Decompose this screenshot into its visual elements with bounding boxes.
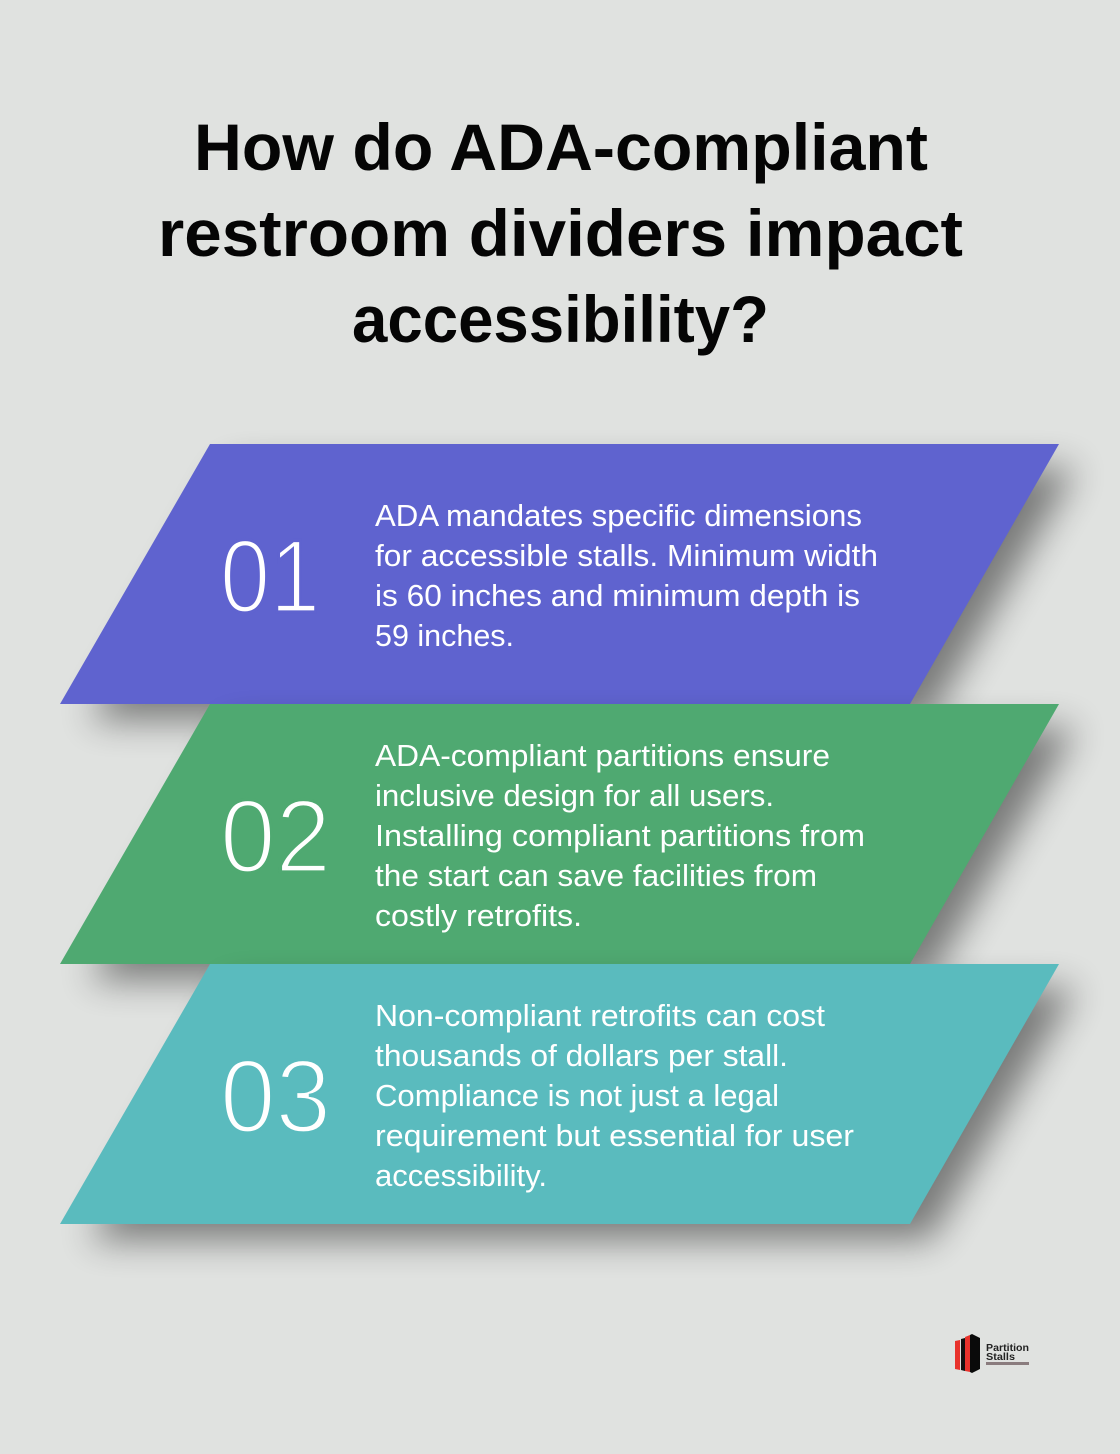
logo: Partition Stalls <box>955 1334 1029 1373</box>
title: How do ADA-compliant <box>194 110 928 184</box>
text: step 01: is 60 inches and minimum depth is <box>375 578 860 613</box>
text: step 02: the start can save facilities from <box>375 858 817 893</box>
number 01: 01 <box>220 519 320 635</box>
number 02: 02 <box>220 779 331 895</box>
text: step 01 <box>375 498 878 653</box>
text: step 03: Non-compliant retrofits can cost <box>375 998 825 1033</box>
title: restroom dividers impact <box>158 196 963 270</box>
text: step 02: inclusive design for all users. <box>375 778 774 813</box>
panel: step 02 <box>60 704 1076 980</box>
logo wordmark: Partition <box>986 1343 1029 1354</box>
text: step 02 <box>375 738 865 933</box>
text: step 03: thousands of dollars per stall. <box>375 1038 788 1073</box>
text: step 01: for accessible stalls. Minimum width <box>375 538 878 573</box>
logo wordmark <box>986 1343 1029 1365</box>
text: step 03: Compliance is not just a legal <box>375 1078 779 1113</box>
panel: step 01 <box>60 444 1076 720</box>
text: step 01: 59 inches. <box>375 618 514 653</box>
text: step 02: costly retrofits. <box>375 898 582 933</box>
text: step 03: requirement but essential for user <box>375 1118 854 1153</box>
text: step 01: ADA mandates specific dimensions <box>375 498 862 533</box>
icon: partition bars <box>955 1334 980 1373</box>
panel: step 03 <box>60 964 1076 1240</box>
text: step 02: ADA-compliant partitions ensure <box>375 738 830 773</box>
number 03: 03 <box>220 1039 331 1155</box>
text: step 02: Installing compliant partitions from <box>375 818 865 853</box>
title: accessibility? <box>352 282 769 356</box>
text: step 03 <box>375 998 854 1193</box>
logo wordmark: Stalls <box>986 1352 1015 1363</box>
title <box>158 110 963 356</box>
text: step 03: accessibility. <box>375 1158 547 1193</box>
